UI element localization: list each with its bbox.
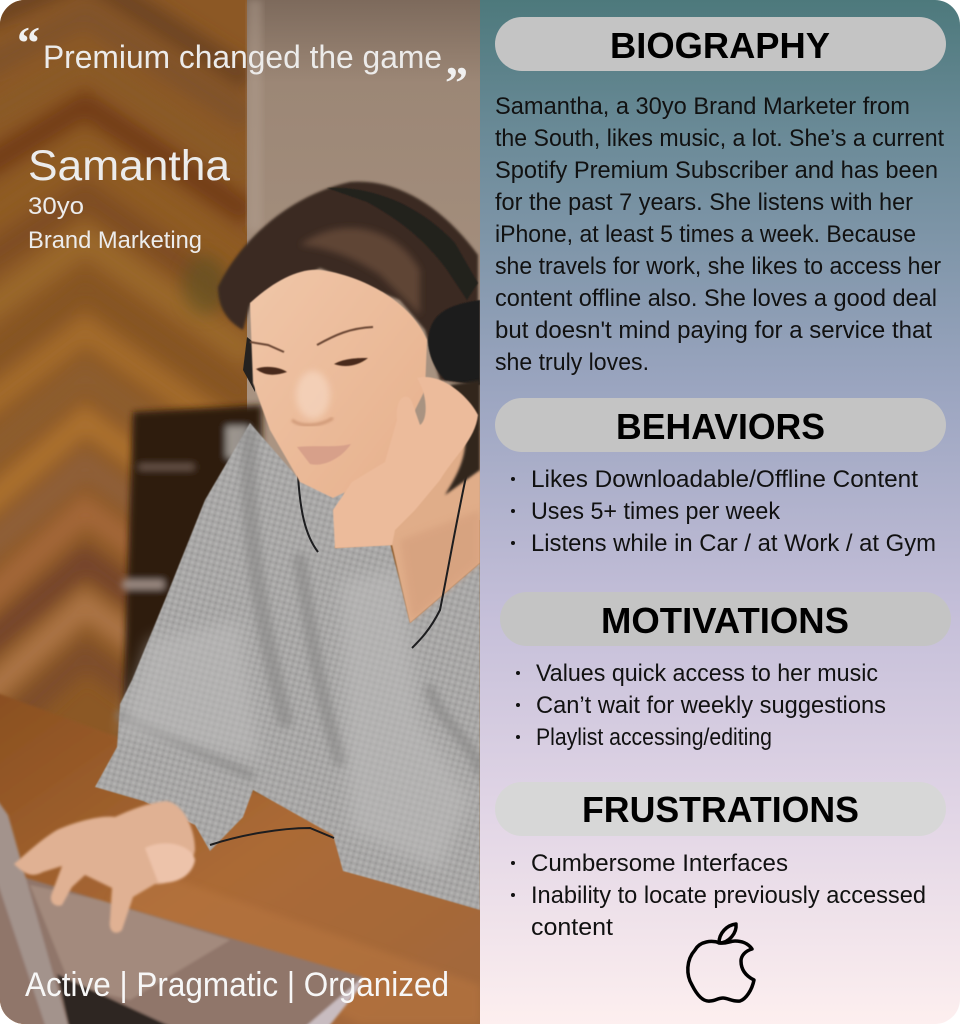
biography text: content offline also. She loves a good deal (495, 285, 937, 312)
frustrations list: content (531, 914, 613, 941)
photo: earphone cable (210, 476, 467, 846)
biography text: but doesn't mind paying for a service that (495, 317, 932, 344)
photo: hair highlight (300, 228, 420, 315)
biography text (495, 93, 944, 376)
frustrations list (511, 850, 926, 941)
quote text: Premium changed the game (43, 39, 442, 75)
motivations list (516, 660, 886, 751)
heading: frustrations: FRUSTRATIONS (582, 789, 859, 830)
role: Brand Marketing (28, 227, 202, 254)
photo: desk highlight (133, 884, 478, 1022)
photo background: herringbone wood wall (0, 0, 250, 775)
photo: left earcup (243, 337, 256, 392)
motivations list: Can’t wait for weekly suggestions (536, 692, 886, 719)
motivations list: Values quick access to her music (536, 660, 878, 687)
closing quote mark: ” (445, 57, 468, 108)
heading: motivations: MOTIVATIONS (601, 600, 849, 641)
panel: right gradient background (480, 0, 960, 1024)
photo background: wall edge highlight (248, 0, 262, 230)
photo: headphones band and earcup (327, 188, 480, 385)
photo: chest shade (404, 516, 477, 612)
photo: facial features (250, 327, 373, 465)
heading: behaviors: BEHAVIORS (616, 406, 825, 447)
icon: apple logo (688, 924, 754, 1001)
frustrations list: Cumbersome Interfaces (531, 850, 788, 877)
frustrations list: Inability to locate previously accessed (531, 882, 926, 909)
name: Samantha (28, 142, 230, 190)
photo background: dark door (122, 405, 262, 745)
quote (17, 17, 468, 108)
photo: face (250, 270, 427, 498)
heading: behaviors (495, 398, 946, 452)
biography text: the South, likes music, a lot. She’s a current (495, 125, 944, 152)
biography text: Spotify Premium Subscriber and has been (495, 157, 938, 184)
persona identity (28, 142, 230, 254)
photo: sweater shading (120, 435, 480, 775)
biography text: for the past 7 years. She listens with her (495, 189, 913, 216)
motivations list: Playlist accessing/editing (536, 724, 772, 751)
photo: typing hand (14, 801, 195, 933)
opening quote mark: “ (17, 17, 40, 68)
behaviors list: Listens while in Car / at Work / at Gym (531, 530, 936, 557)
heading: motivations (500, 592, 951, 646)
behaviors list: Likes Downloadable/Offline Content (531, 466, 918, 493)
photo: wooden desk (0, 684, 500, 1024)
photo: supporting hand (333, 377, 478, 548)
biography text: iPhone, at least 5 times a week. Because (495, 221, 916, 248)
photo base colour (0, 0, 480, 1024)
panel: photo of Samantha (0, 0, 500, 1024)
heading: frustrations (495, 782, 946, 836)
photo: neck and chest skin (335, 430, 480, 623)
heading: biography: BIOGRAPHY (610, 25, 830, 66)
behaviors list: Uses 5+ times per week (531, 498, 781, 525)
photo: sweater body (95, 423, 480, 910)
photo background: soft green plant blur (183, 255, 227, 315)
biography text: she travels for work, she likes to access her (495, 253, 941, 280)
photo background: wall (240, 0, 480, 520)
traits tagline: Active | Pragmatic | Organized (25, 966, 449, 1004)
biography text: Samantha, a 30yo Brand Marketer from (495, 93, 910, 120)
photo: laptop (0, 790, 363, 1024)
photo: hair (218, 182, 478, 385)
heading: biography (495, 17, 946, 71)
photo: sweater highlights (120, 570, 470, 870)
age: 30yo (28, 193, 84, 220)
photo: hair wisps behind hand (445, 380, 480, 495)
biography text: she truly loves. (495, 349, 649, 376)
behaviors list (511, 466, 936, 557)
